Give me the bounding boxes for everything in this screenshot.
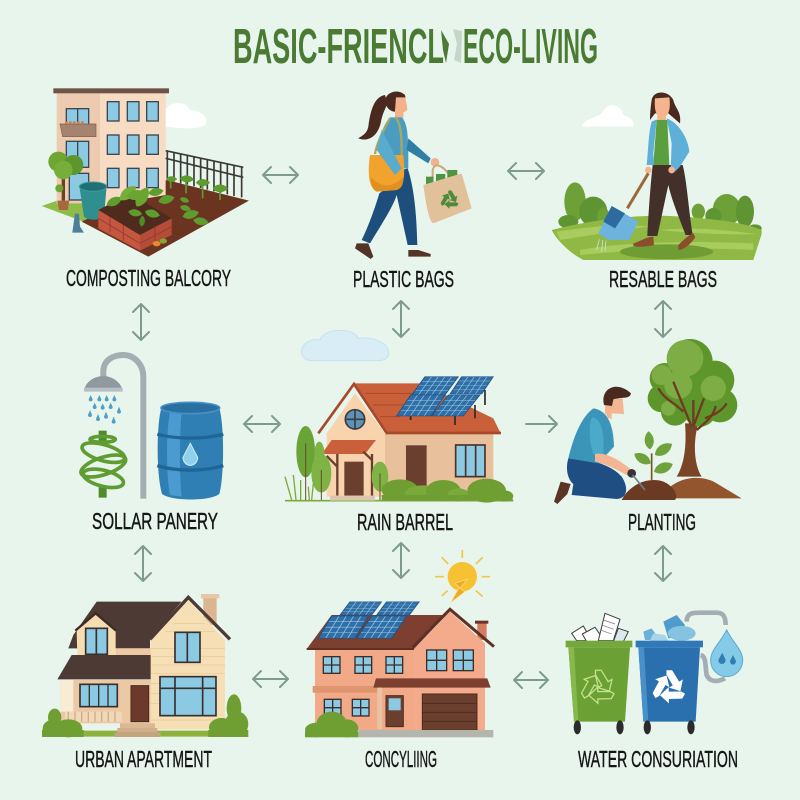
label: resable bags: RESABLE BAGS bbox=[609, 266, 717, 292]
illustration: man planting beside tree bbox=[554, 339, 742, 504]
illustration: house with solar roof bbox=[305, 602, 494, 737]
label: planting: PLANTING bbox=[628, 509, 696, 535]
illustration: shower, coil and rain barrel bbox=[78, 355, 223, 499]
panel: urban apartment bbox=[42, 594, 248, 772]
illustration: apartment with garden bbox=[42, 88, 249, 257]
label: plastic bags: PLASTIC BAGS bbox=[353, 266, 454, 292]
panel: resable bags bbox=[552, 92, 762, 292]
illustration: recycling bins with water drop bbox=[566, 613, 743, 734]
icon: sun with lightning bolt bbox=[435, 550, 490, 603]
arrow bbox=[393, 301, 409, 337]
illustration: cloud bbox=[302, 330, 389, 361]
title: BASIC-FRIENCL bbox=[233, 20, 444, 74]
panel: composting balcony bbox=[42, 88, 249, 291]
arrow bbox=[253, 671, 288, 687]
arrow bbox=[135, 546, 151, 581]
label: urban apartment: URBAN APARTMENT bbox=[75, 746, 212, 772]
panel: sollar panery bbox=[78, 355, 223, 534]
label: concyliing: CONCYLIING bbox=[365, 746, 437, 772]
panel: plastic bags bbox=[353, 91, 472, 292]
illustration: woman carrying tote bags bbox=[355, 91, 472, 259]
arrow bbox=[508, 163, 544, 179]
arrow bbox=[393, 543, 409, 578]
label: composting balcory: COMPOSTING BALCORY bbox=[66, 265, 231, 291]
text: ECO-LIVING bbox=[463, 20, 598, 74]
panel: rain barrel bbox=[285, 330, 513, 535]
panel: concyliing bbox=[305, 550, 494, 772]
arrow bbox=[263, 167, 298, 183]
illustration: house with solar panels bbox=[285, 377, 513, 503]
illustration: two-storey house bbox=[42, 594, 248, 737]
arrow bbox=[526, 416, 557, 432]
arrow bbox=[655, 301, 671, 337]
label: sollar panery: SOLLAR PANERY bbox=[92, 508, 218, 534]
arrow bbox=[514, 672, 548, 688]
panel: water consuriation bbox=[566, 613, 743, 772]
panel: planting bbox=[554, 339, 742, 535]
arrow bbox=[133, 304, 149, 340]
illustration: woman with rake on lawn bbox=[552, 92, 762, 260]
arrow bbox=[244, 416, 280, 432]
label: rain barrel: RAIN BARREL bbox=[357, 509, 453, 535]
arrow bbox=[655, 546, 671, 581]
